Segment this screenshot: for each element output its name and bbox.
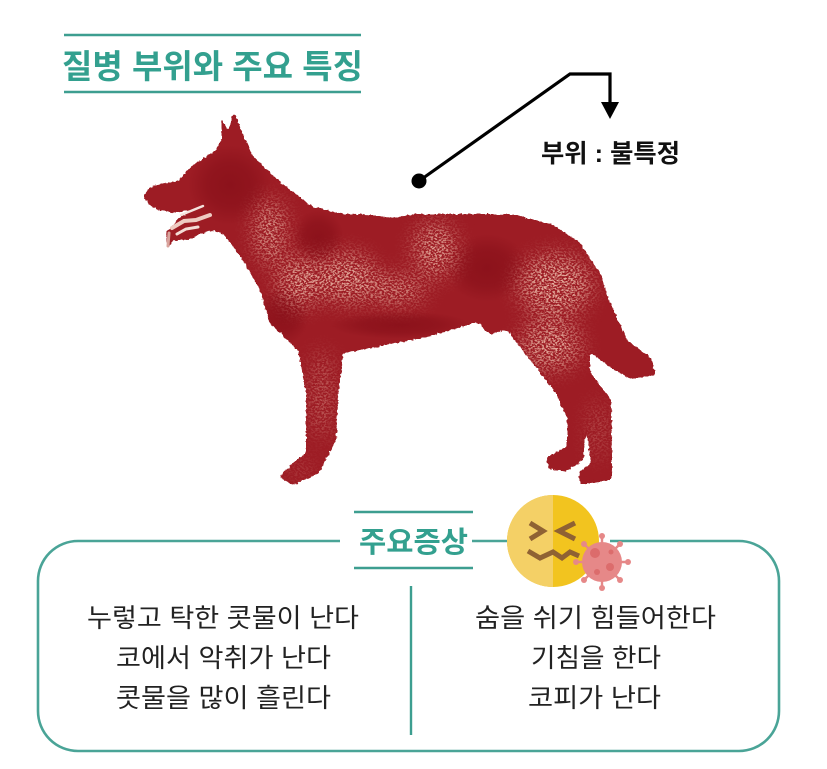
- symptoms: right column: 숨을 쉬기 힘들어한다: [475, 603, 716, 633]
- icon: virus: [573, 533, 631, 591]
- heading: main symptoms: 주요증상: [359, 526, 468, 559]
- icon: sick face: [507, 495, 631, 591]
- label: body part: 부위 : 불특정: [541, 140, 680, 168]
- panel: main symptoms: [38, 512, 779, 751]
- arrow: pointer to body part: [412, 74, 619, 188]
- title: 질병 부위와 주요 특징: [62, 48, 363, 85]
- heading: main symptoms: [354, 512, 473, 568]
- symptoms: left column: [87, 603, 359, 713]
- symptoms: left column: 누렇고 탁한 콧물이 난다: [87, 603, 359, 633]
- symptoms: left column: 콧물을 많이 흘린다: [116, 683, 331, 713]
- dog mouth and tongue: [168, 206, 210, 246]
- dog illustration: [144, 114, 656, 485]
- symptoms: right column: 코피가 난다: [528, 683, 661, 713]
- symptoms: left column: 코에서 악취가 난다: [116, 643, 331, 673]
- symptoms: right column: 기침을 한다: [531, 643, 661, 673]
- symptoms: right column: [475, 603, 716, 713]
